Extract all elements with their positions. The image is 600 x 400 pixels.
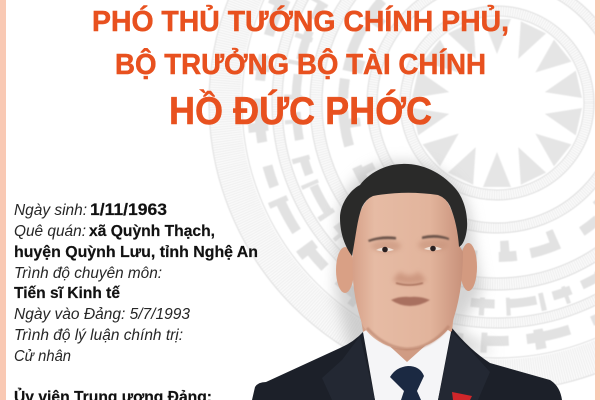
nose base — [396, 283, 423, 285]
bronze drum watermark — [209, 0, 600, 391]
right border strip — [595, 0, 600, 400]
qualification label: Trình độ chuyên môn: — [14, 265, 162, 282]
hair — [340, 164, 467, 256]
title line 2: BỘ TRƯỞNG BỘ TÀI CHÍNH — [115, 47, 486, 81]
biography text block — [14, 201, 258, 400]
title line 1: PHÓ THỦ TƯỚNG CHÍNH PHỦ, — [92, 4, 509, 38]
date of birth: Ngày sinh: — [14, 202, 87, 219]
drum dotted rings — [225, 0, 600, 375]
left eye socket shadow — [371, 240, 401, 252]
party entry date: Ngày vào Đảng: 5/7/1993 — [14, 306, 190, 323]
right ear — [460, 243, 477, 291]
title — [92, 4, 509, 133]
title name: HỒ ĐỨC PHỚC — [169, 89, 432, 133]
hometown: xã Quỳnh Thạch, — [89, 223, 215, 240]
hometown: Quê quán: — [14, 223, 86, 240]
political theory value: Cử nhân — [14, 348, 71, 365]
necktie — [390, 366, 424, 400]
left eyebrow — [368, 236, 396, 242]
portrait — [252, 162, 562, 400]
right eyebrow — [422, 235, 449, 240]
hometown line 2: huyện Quỳnh Lưu, tỉnh Nghệ An — [14, 244, 258, 261]
left ear — [336, 247, 354, 293]
left border strip — [0, 0, 6, 400]
drum central star panel — [410, 16, 584, 190]
drum figure bands — [257, 0, 600, 343]
hometown — [14, 223, 215, 240]
nose — [393, 272, 426, 284]
face — [352, 192, 463, 349]
right eye — [424, 246, 442, 251]
political theory label: Trình độ lý luận chính trị: — [14, 327, 183, 344]
neck — [358, 295, 456, 364]
left eye — [376, 247, 394, 252]
qualification value: Tiến sĩ Kinh tế — [14, 285, 120, 302]
portrait shadow — [335, 162, 495, 352]
party pin — [452, 392, 472, 400]
jacket lapel shading — [322, 332, 490, 400]
date of birth: 1/11/1963 — [90, 201, 167, 219]
drum thin ring lines — [209, 0, 600, 391]
chin shadow — [367, 326, 449, 349]
suit jacket — [252, 328, 562, 400]
shirt collar — [363, 328, 451, 400]
mouth — [391, 297, 430, 306]
date of birth — [14, 201, 167, 219]
right eye socket shadow — [418, 239, 448, 251]
